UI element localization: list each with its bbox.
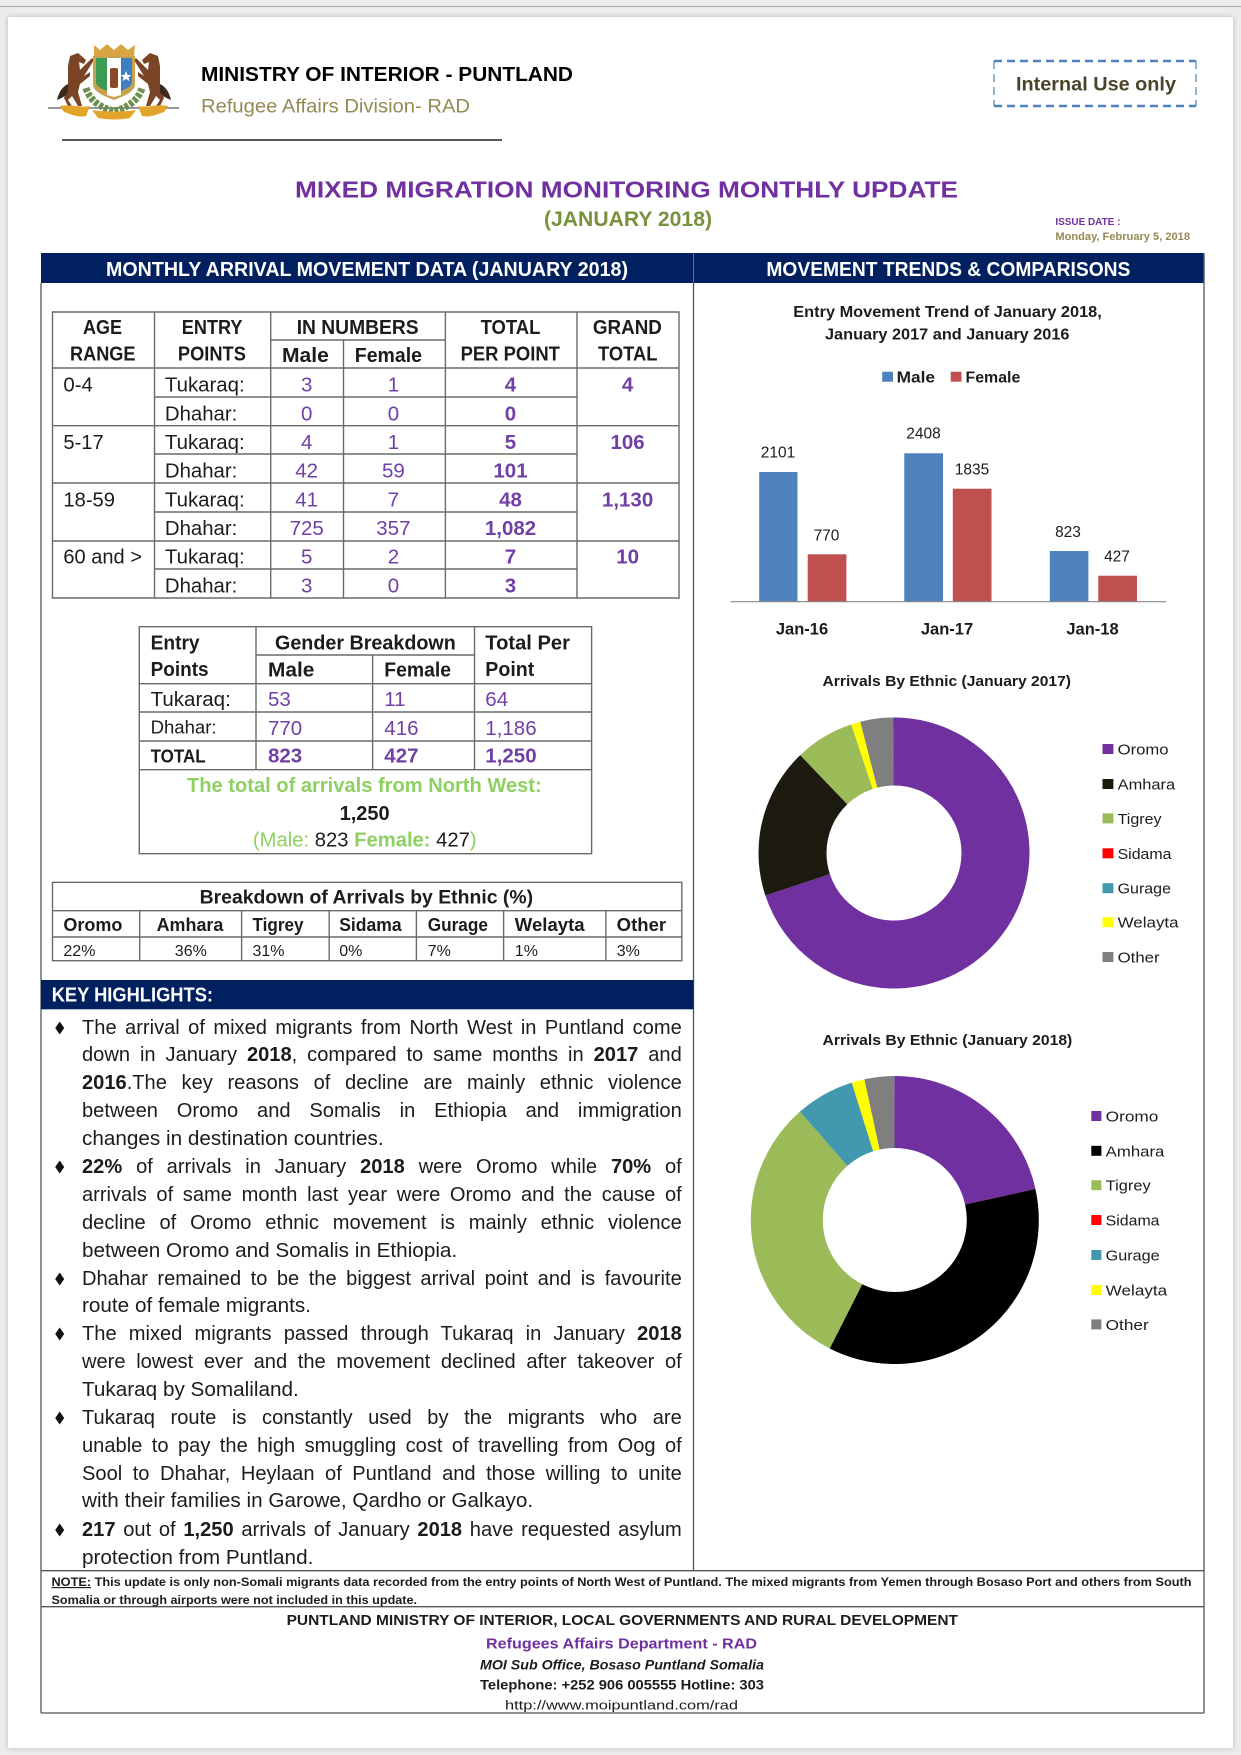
highlight: Oromo share: between Oromo and Somalis in Ethiopia. (82, 1239, 457, 1262)
x axis labels (776, 620, 1119, 638)
heading: ministry: MINISTRY OF INTERIOR - PUNTLAND (201, 63, 573, 86)
table: arrivals by age range: RANGE (70, 344, 136, 366)
chart legend: Male (897, 370, 935, 386)
highlight: Oromo share: decline of Oromo ethnic movement is mainly ethnic violence (82, 1211, 681, 1234)
data labels: 2408 (906, 426, 941, 442)
highlight: arrivals decline: changes in destination countries. (82, 1127, 383, 1150)
table: arrivals by age range: Tukaraq: (165, 546, 245, 569)
table: breakdown of arrivals by ethnic: 1% (515, 943, 538, 960)
table: breakdown of arrivals by ethnic: 22% (63, 943, 95, 960)
table: arrivals by age range: 0 (388, 574, 399, 597)
table: breakdown of arrivals by ethnic: Welayta (515, 914, 585, 935)
table: breakdown of arrivals by ethnic: Oromo (63, 914, 122, 935)
table: arrivals by age range: 101 (493, 460, 528, 483)
table: gender breakdown: 1,250 (340, 803, 390, 825)
table: arrivals by age range: 357 (376, 517, 411, 540)
text block: key highlights (55, 1016, 682, 1569)
table: gender breakdown: 416 (384, 717, 419, 740)
data labels (761, 426, 1130, 566)
table: breakdown of arrivals by ethnic: 36% (175, 943, 207, 960)
table: breakdown of arrivals by ethnic: 3% (617, 943, 640, 960)
table: arrivals by age range: 7 (388, 489, 399, 512)
title: MIXED MIGRATION MONITORING MONTHLY UPDATE (295, 176, 958, 202)
legend: Amhara (1118, 776, 1176, 794)
highlight: Dhahar route: Dhahar remained to be the biggest arrival point and is favourite (82, 1267, 681, 1290)
table: breakdown of arrivals by ethnic: Tigrey (252, 914, 304, 935)
donut (792, 752, 996, 954)
legend: Sidama (1118, 846, 1172, 863)
table: gender breakdown: Tukaraq: (151, 688, 231, 711)
chart: arrivals by ethnic January 2018 donut: Arrivals By Ethnic (January 2018) (822, 1033, 1072, 1049)
table: arrivals by age range: Dhahar: (165, 517, 237, 540)
chart legend: Female (966, 370, 1020, 386)
chart legend (882, 370, 1020, 386)
table: arrivals by age range: AGE (83, 317, 122, 339)
table: gender breakdown: 770 (268, 717, 302, 740)
legend (1091, 1108, 1168, 1334)
highlight: Dhahar route: route of female migrants. (82, 1294, 311, 1317)
footer contact block: MOI Sub Office, Bosaso Puntland Somalia (480, 1658, 765, 1672)
highlight: asylum requests: 217 out of 1,250 arrivals of January 2018 have requested asylum (82, 1518, 681, 1541)
table: gender breakdown: 427 (384, 744, 419, 768)
table: breakdown of arrivals by ethnic: Breakdown of Arrivals by Ethnic (%) (200, 887, 533, 908)
table: arrivals by age range: 0 (301, 403, 312, 426)
table: arrivals by age range: POINTS (178, 344, 246, 366)
table: gender breakdown: 1,250 (485, 744, 537, 768)
highlight: Dhahar route (55, 1267, 681, 1317)
data labels: 427 (1104, 548, 1130, 566)
data labels: 823 (1055, 524, 1081, 541)
chart title: January 2017 and January 2016 (825, 326, 1070, 344)
table: gender breakdown: 64 (485, 688, 508, 711)
table: arrivals by age range: PER POINT (461, 344, 560, 366)
table: arrivals by age range: ENTRY (182, 317, 243, 339)
table: gender breakdown (139, 627, 592, 854)
separator line (62, 139, 502, 141)
table: arrivals by age range: Dhahar: (165, 460, 237, 483)
highlight: Tukaraq lowest: Tukaraq by Somaliland. (82, 1378, 298, 1401)
table: arrivals by age range: Dhahar: (165, 574, 237, 597)
table: breakdown of arrivals by ethnic: Other (617, 914, 666, 935)
icon: Puntland coat of arms (48, 44, 179, 120)
highlight: Tukaraq lowest: The mixed migrants passed through Tukaraq in January 2018 (82, 1322, 681, 1345)
highlight: Tukaraq route use: with their families in Garowe, Qardho or Galkayo. (82, 1489, 533, 1512)
highlight: arrivals decline: 2016.The key reasons of decline are mainly ethnic violence (82, 1071, 681, 1094)
table: arrivals by age range: 4 (301, 431, 312, 454)
highlight: arrivals decline (55, 1016, 681, 1150)
table: arrivals by age range: Dhahar: (165, 403, 237, 426)
section header bars: MONTHLY ARRIVAL MOVEMENT DATA (JANUARY 2018) (106, 259, 628, 281)
chart title: Entry Movement Trend of January 2018, (793, 304, 1102, 321)
legend (1102, 742, 1179, 966)
data labels: 2101 (761, 444, 795, 462)
table: arrivals by age range: 2 (388, 546, 399, 569)
highlight: arrivals decline: down in January 2018, compared to same months in 2017 and (82, 1043, 681, 1066)
table: arrivals by age range: Tukaraq: (165, 489, 245, 512)
legend: Oromo (1106, 1108, 1158, 1126)
badge: internal use only: Internal Use only (1016, 74, 1176, 96)
heading: key highlights: KEY HIGHLIGHTS: (52, 985, 213, 1007)
note: Somalia or through airports were not included in this update. (52, 1595, 417, 1607)
table: breakdown of arrivals by ethnic: Amhara (157, 914, 224, 935)
table: arrivals by age range: Tukaraq: (165, 374, 245, 397)
table: gender breakdown: 53 (268, 688, 291, 711)
highlight: Oromo share: arrivals of same month last year were Oromo and the cause of (82, 1183, 681, 1206)
bars (730, 453, 1166, 602)
table: gender breakdown: Male (268, 660, 314, 682)
table: breakdown of arrivals by ethnic: Gurage (428, 914, 488, 935)
footer contact block: Refugees Affairs Department - RAD (486, 1636, 757, 1652)
chart: arrivals by ethnic January 2018 donut (787, 1033, 1168, 1334)
legend: Gurage (1118, 880, 1171, 898)
legend: Other (1118, 950, 1160, 966)
table: arrivals by age range: 41 (295, 489, 318, 512)
table: arrivals by age range: 4 (622, 374, 634, 397)
table: gender breakdown: Female (384, 660, 451, 682)
table: gender breakdown: The total of arrivals from North West: (187, 775, 542, 797)
table: gender breakdown: Dhahar: (151, 716, 217, 737)
legend: Tigrey (1118, 811, 1162, 828)
legend: Other (1106, 1317, 1149, 1334)
legend: Amhara (1106, 1143, 1165, 1160)
table: arrivals by age range: 0 (505, 403, 516, 426)
table: gender breakdown: Gender Breakdown (275, 632, 456, 654)
legend: Sidama (1106, 1212, 1160, 1230)
highlight: Oromo share: 22% of arrivals in January 2018 were Oromo while 70% of (82, 1155, 681, 1178)
issue date: Monday, February 5, 2018 (1055, 231, 1190, 243)
chart: arrivals by ethnic January 2017 donut (792, 674, 1179, 966)
footer contact block: PUNTLAND MINISTRY OF INTERIOR, LOCAL GOVERNMENTS AND RURAL DEVELOPMENT (287, 1612, 958, 1629)
table: arrivals by age range: 1,082 (485, 517, 536, 540)
table: gender breakdown: Entry (151, 632, 200, 654)
table: arrivals by age range: 48 (499, 489, 522, 512)
chart: arrivals by ethnic January 2017 donut: Arrivals By Ethnic (January 2017) (822, 674, 1071, 690)
table: arrivals by age range: Female (355, 345, 422, 367)
table: arrivals by age range: 0 (388, 403, 399, 426)
note: NOTE: This update is only non-Somali migrants data recorded from the entry points of North West of Puntland. The mixed migrants from Yemen through Bosaso Port and others from South (52, 1577, 1192, 1589)
highlight: Tukaraq route use: unable to pay the high smuggling cost of travelling from Oog of (82, 1434, 681, 1457)
section header bars: MOVEMENT TRENDS & COMPARISONS (766, 259, 1130, 281)
badge: internal use only (994, 61, 1196, 106)
table: gender breakdown: 11 (384, 688, 406, 711)
issue date (1055, 216, 1190, 243)
table: arrivals by age range: 3 (301, 374, 312, 397)
table: arrivals by age range: 4 (505, 374, 517, 397)
table: arrivals by age range: 42 (295, 460, 318, 483)
highlight: Tukaraq route use (55, 1406, 682, 1512)
table: arrivals by age range: 5-17 (63, 431, 104, 454)
table: gender breakdown: 823 (268, 744, 302, 768)
legend: Oromo (1118, 742, 1169, 758)
text: division: Refugee Affairs Division- RAD (201, 96, 470, 118)
legend: Gurage (1106, 1248, 1160, 1264)
legend: Welayta (1118, 914, 1179, 932)
table: gender breakdown: TOTAL (151, 745, 206, 766)
chart: entry movement trend bar chart (730, 304, 1166, 638)
data labels: 1835 (955, 462, 989, 478)
table: breakdown of arrivals by ethnic: 0% (339, 943, 362, 960)
table: breakdown of arrivals by ethnic: 31% (252, 943, 285, 960)
chart title (793, 304, 1102, 344)
footer contact block: http://www.moipuntland.com/rad (505, 1698, 738, 1712)
table: gender breakdown: (Male: 823 Female: 427) (253, 830, 477, 852)
table: breakdown of arrivals by ethnic: Sidama (339, 914, 402, 935)
highlight: Tukaraq route use: Sool to Dhahar, Heylaan of Puntland and those willing to unite (82, 1462, 681, 1485)
table: arrivals by age range (52, 312, 679, 598)
legend: Welayta (1106, 1282, 1168, 1300)
table: arrivals by age range: GRAND (593, 317, 662, 339)
highlight: arrivals decline: The arrival of mixed migrants from North West in Puntland come (82, 1016, 681, 1038)
legend: Tigrey (1106, 1178, 1151, 1195)
table: arrivals by age range: 7 (505, 546, 516, 569)
table: arrivals by age range: TOTAL (481, 317, 540, 339)
table: gender breakdown: Point (485, 659, 535, 681)
data labels: 770 (814, 528, 840, 544)
table: breakdown of arrivals by ethnic (52, 882, 682, 961)
table: arrivals by age range: 3 (505, 574, 516, 597)
table: arrivals by age range: 0-4 (63, 374, 93, 397)
table: arrivals by age range: 106 (610, 431, 645, 454)
section header bars (41, 253, 1204, 283)
table: arrivals by age range: 1 (388, 431, 399, 454)
highlight: Oromo share (55, 1155, 682, 1262)
table: arrivals by age range: IN NUMBERS (297, 317, 419, 339)
table: arrivals by age range: 59 (382, 460, 405, 483)
highlight: asylum requests (55, 1518, 681, 1569)
table: arrivals by age range: 725 (290, 517, 324, 540)
table: gender breakdown: Total Per (485, 632, 570, 654)
x axis labels: Jan-17 (921, 620, 973, 638)
table: arrivals by age range: 5 (505, 431, 516, 454)
table: breakdown of arrivals by ethnic: 7% (428, 943, 451, 960)
table: gender breakdown: Points (151, 659, 209, 681)
table: arrivals by age range: Tukaraq: (165, 431, 245, 454)
x axis labels: Jan-16 (776, 620, 828, 638)
table: arrivals by age range: TOTAL (598, 344, 657, 366)
heading: key highlights (41, 980, 694, 1009)
table: arrivals by age range: 3 (301, 574, 312, 597)
table: arrivals by age range: 18-59 (63, 489, 115, 512)
table: arrivals by age range: 1 (388, 374, 399, 397)
highlight: Tukaraq lowest (55, 1322, 682, 1401)
table: arrivals by age range: 5 (301, 546, 312, 569)
table: arrivals by age range: 10 (616, 546, 639, 569)
footer contact block (287, 1612, 958, 1712)
highlight: Tukaraq route use: Tukaraq route is constantly used by the migrants who are (82, 1406, 681, 1429)
highlight: arrivals decline: between Oromo and Somalis in Ethiopia and immigration (82, 1099, 681, 1122)
footer contact block: Telephone: +252 906 005555 Hotline: 303 (480, 1678, 765, 1692)
table: arrivals by age range: 1,130 (602, 489, 653, 512)
highlight: Tukaraq lowest: were lowest ever and the movement declined after takeover of (82, 1350, 681, 1373)
table: arrivals by age range: 60 and > (63, 546, 142, 569)
header (48, 44, 1196, 140)
note (52, 1577, 1192, 1607)
table: arrivals by age range: Male (282, 345, 329, 367)
table: gender breakdown: 1,186 (485, 717, 537, 740)
issue date: ISSUE DATE : (1055, 216, 1120, 228)
subtitle: (JANUARY 2018) (544, 208, 712, 231)
highlight: asylum requests: protection from Puntland. (82, 1546, 313, 1569)
donut (787, 1112, 1003, 1328)
x axis labels: Jan-18 (1066, 620, 1119, 638)
